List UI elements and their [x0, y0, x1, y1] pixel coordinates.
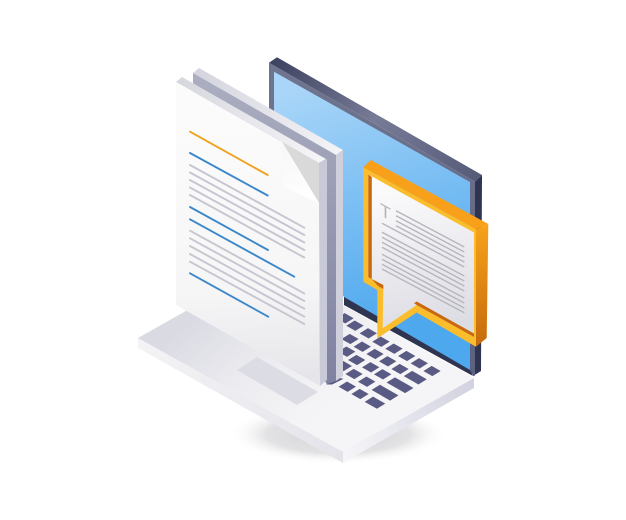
page fold: [282, 142, 319, 203]
bubble inner shading: [368, 174, 474, 337]
keyboard keys: [327, 314, 440, 408]
touchpad: [237, 357, 318, 405]
laptop base: [138, 264, 474, 463]
front document: [176, 77, 327, 386]
screen bottom bezel: [344, 297, 473, 376]
laptop screen: [269, 57, 482, 376]
document text lines: [190, 132, 304, 324]
bubble title glyph: T: [380, 200, 391, 226]
ground shadow: [228, 404, 448, 464]
bubble frame: [363, 167, 476, 347]
screen bezel: [269, 63, 475, 376]
screen side edge: [473, 175, 482, 376]
screen top edge: [269, 57, 482, 182]
back document: [193, 68, 343, 384]
bubble paper: [368, 174, 474, 337]
screen display: [274, 72, 470, 370]
bubble text lines: [382, 211, 464, 313]
speech bubble: [363, 160, 488, 347]
